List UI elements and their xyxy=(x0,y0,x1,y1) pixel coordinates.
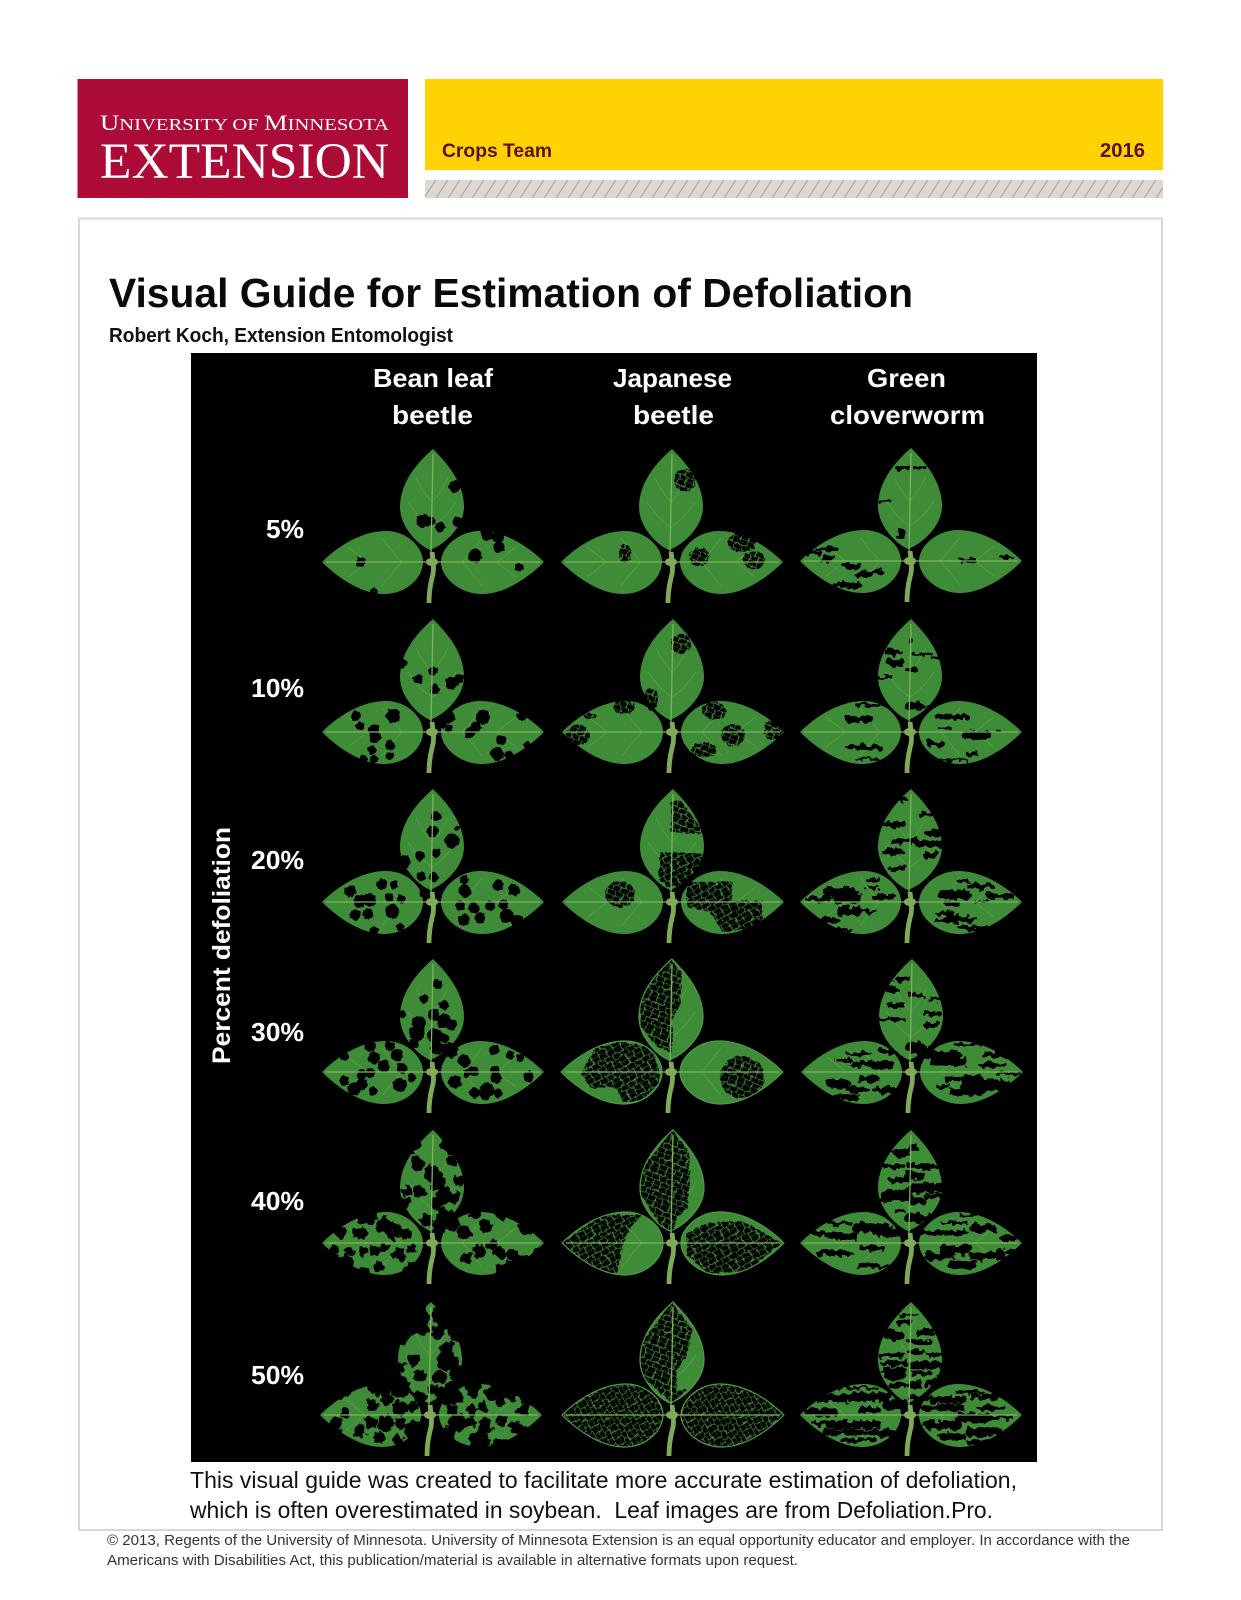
row label 40%: 40% xyxy=(251,1186,304,1216)
title: Visual Guide for Estimation of Defoliation xyxy=(109,270,913,316)
leaf: green cloverworm 20% xyxy=(800,789,1022,943)
caption: This visual guide was created to facilitate more accurate estimation of defoliation, xyxy=(190,1467,1017,1493)
row label 20%: 20% xyxy=(251,845,304,875)
column heading: Japanese beetle: Japanese xyxy=(613,363,732,393)
leaf: bean leaf beetle 20% xyxy=(322,789,544,943)
logo: University of Minnesota Extension xyxy=(78,79,408,198)
leaf: bean leaf beetle 40% xyxy=(322,1130,544,1284)
column heading: Bean leaf beetle: beetle xyxy=(392,400,473,430)
column heading: Green cloverworm: Green xyxy=(867,363,946,393)
leaf: Japanese beetle 5% xyxy=(561,449,783,603)
chart panel: leaf defoliation grid xyxy=(191,353,1037,1462)
leaf: Japanese beetle 20% xyxy=(562,789,784,943)
leaf: Japanese beetle 40% xyxy=(562,1130,784,1284)
header band: Crops Team 2016: Crops Team xyxy=(442,141,552,162)
logo: University of Minnesota Extension: EXTENSION xyxy=(100,134,389,190)
header band: Crops Team 2016: 2016 xyxy=(1100,140,1145,162)
author line: Robert Koch, Extension Entomologist xyxy=(109,325,453,347)
caption xyxy=(189,1467,1017,1523)
leaf: green cloverworm 50% xyxy=(800,1302,1022,1456)
logo: University of Minnesota Extension: UNIVERSITY OF MINNESOTA xyxy=(100,110,390,135)
column heading: Bean leaf beetle: Bean leaf xyxy=(373,363,493,393)
leaf: green cloverworm 40% xyxy=(800,1130,1022,1284)
leaf: Japanese beetle 10% xyxy=(562,619,784,773)
column heading: Green cloverworm xyxy=(830,363,985,430)
footer copyright: Americans with Disabilities Act, this publication/material is available in alternative formats upon request. xyxy=(107,1553,798,1569)
column heading: Green cloverworm: cloverworm xyxy=(830,400,985,430)
panel frame xyxy=(79,218,1162,1530)
leaf: bean leaf beetle 10% xyxy=(322,619,544,773)
row label 30%: 30% xyxy=(251,1017,304,1047)
leaf: Japanese beetle 30% xyxy=(561,959,783,1113)
leaf: green cloverworm 10% xyxy=(800,619,1022,773)
leaf: bean leaf beetle 5% xyxy=(322,449,544,603)
leaf: Japanese beetle 50% xyxy=(562,1302,784,1456)
column heading: Bean leaf beetle xyxy=(373,363,493,430)
footer copyright xyxy=(107,1533,1130,1569)
footer copyright: © 2013, Regents of the University of Minnesota. University of Minnesota Extension is an equal opportunity educator and employer. In accordance with the xyxy=(107,1533,1130,1549)
column heading: Japanese beetle: beetle xyxy=(633,400,714,430)
row label 50%: 50% xyxy=(251,1360,304,1390)
leaf: bean leaf beetle 50% xyxy=(320,1299,542,1456)
leaf: bean leaf beetle 30% xyxy=(322,959,544,1113)
column heading: Japanese beetle xyxy=(613,363,732,430)
leaf: green cloverworm 5% xyxy=(800,448,1022,602)
header band: Crops Team 2016 xyxy=(425,79,1163,170)
axis label: Percent defoliation: Percent defoliation xyxy=(208,827,236,1064)
row label 5%: 5% xyxy=(266,514,304,544)
caption: which is often overestimated in soybean. Leaf images are from Defoliation.Pro. xyxy=(189,1497,993,1523)
row label 10%: 10% xyxy=(251,673,304,703)
leaf: green cloverworm 30% xyxy=(801,959,1023,1113)
hatched bar xyxy=(425,180,1163,198)
